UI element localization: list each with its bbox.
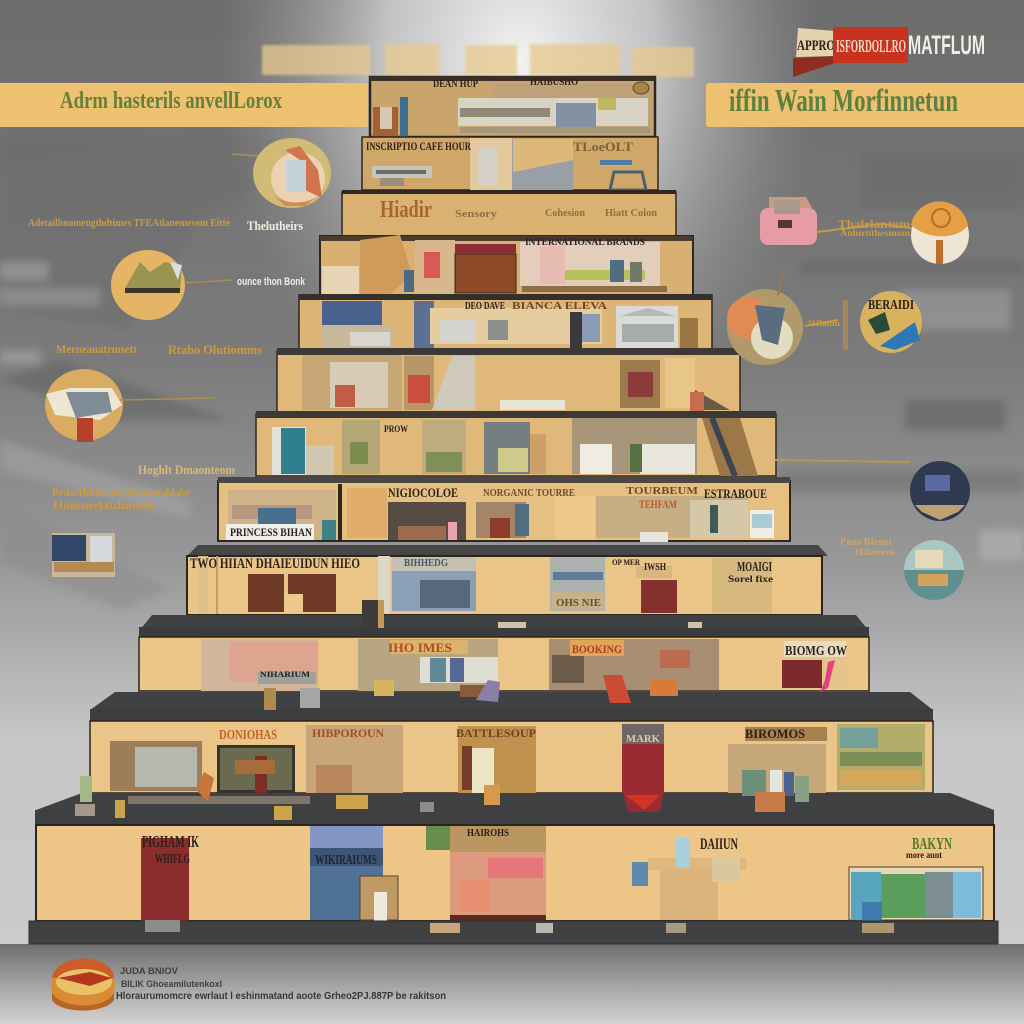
left banner [0, 83, 368, 127]
tier 5: DEO DAVE [465, 301, 505, 312]
furniture on roof terraces [75, 600, 809, 820]
tier 8: PRINCESS BIHAN [230, 525, 312, 539]
icon: blue shoe circle: BERAIDI [868, 298, 914, 313]
logo tag: APPRO [797, 38, 835, 54]
tier 9: IWSH [644, 561, 666, 573]
icon: pink bag [760, 197, 912, 245]
tier 8: NIGIOCOLOE [388, 485, 458, 500]
tier 12: BAKYN [912, 834, 952, 853]
right labels: Poas Blenst [840, 536, 892, 548]
tier 12: WHIFLG [155, 852, 190, 867]
tier 3: Sensory [455, 209, 497, 220]
tier 12: WIKIRAIUMS [315, 853, 377, 868]
tier 12: more aunt [906, 850, 942, 860]
tier 9 [187, 545, 828, 615]
icon: navy circle [775, 460, 970, 521]
left labels: Hoiosnelatdmosbl [53, 498, 156, 512]
left labels: Thelutheirs [247, 218, 303, 233]
tier 8: TOURBEUM [626, 485, 699, 497]
icon: portrait circle [232, 138, 331, 208]
icon: shoe circle [111, 250, 232, 320]
left labels: Hoghlt Dmaonteom [138, 462, 235, 477]
tier 4 [320, 235, 693, 295]
tier 11: BATTLESOUP [456, 726, 536, 740]
tier 12: PIGHAM IK [142, 832, 199, 851]
tier 3: Hiatt Colon [605, 207, 657, 219]
ghost header blocks [262, 44, 694, 77]
tier 11: MARK [626, 733, 660, 745]
tier 1 [370, 76, 655, 137]
left banner: Adrm hasterils anvellLorox [60, 88, 282, 114]
tier 9: MOAIGI [737, 560, 772, 575]
tier 8 [218, 477, 790, 542]
tier 11: HIBPOROUN [312, 726, 384, 740]
tier 9: OP MER [612, 558, 640, 567]
icon: orange swirl [911, 201, 969, 264]
footer text: BILIK Ghoeamilutenkoxl [121, 979, 222, 989]
icon: blue shoe circle [843, 291, 922, 353]
left labels: ounce thon Bonk [237, 276, 306, 288]
left labels [28, 217, 306, 512]
tier 9: OHS NIE [556, 598, 601, 609]
tier 5 [299, 294, 712, 352]
tier 10 [139, 615, 869, 692]
icon: fabric panel [52, 533, 115, 577]
footer text: Hloraurumomcre ewrlaut l eshinmatand aoote Grheo2PJ.887P be rakitson [116, 991, 446, 1002]
tier 12 [35, 793, 994, 924]
tier 2: TLoeOLT [573, 139, 633, 154]
tier 2 [362, 137, 658, 190]
footer text: JUDA BNIOV [120, 966, 178, 976]
tier 9: TWO HIIAN DHAIEUIDUN HIEO [190, 556, 360, 572]
tier 1: DEAN HUP [433, 79, 478, 90]
left labels: Rtabo Olutiomms [168, 342, 262, 357]
tier 12: HAIROHS [467, 827, 509, 839]
tier 12: DAIIUN [700, 836, 738, 853]
logo tag: ISFORDOLLRO [836, 36, 906, 56]
right labels: Hilanrm [855, 547, 896, 557]
right labels: IHlaum [808, 319, 840, 328]
logo tag [793, 27, 985, 77]
right labels: Anlurnthesmom [840, 228, 911, 238]
left labels: Adetailhnomengthdtimes TFEAtlanemesom Eitte [28, 217, 230, 229]
tier 7 [256, 411, 776, 476]
tier 8: TEHFAM [639, 497, 677, 511]
icon: teal circle [904, 540, 964, 600]
left labels: Brdaerldtiurmnsthemtmuldabe [52, 485, 191, 499]
tier 10: IHO IMES [388, 640, 452, 655]
tier 3: Cohesion [545, 208, 585, 219]
tier 3: Hiadir [380, 197, 432, 223]
tier 9: Sorel fixe [728, 574, 773, 584]
tier 11: DONIOHAS [219, 728, 277, 743]
tier 8: NORGANIC TOURRE [483, 487, 575, 499]
tier 11 [90, 692, 933, 796]
base slab [29, 920, 998, 944]
tier 11: BIROMOS [745, 726, 805, 741]
icon: burger badge [51, 958, 115, 1010]
tier 6 [277, 348, 740, 412]
tier 10: NIHARIUM [260, 670, 311, 679]
tier 9: BIHHEDG [404, 558, 448, 569]
icon: box circle [45, 369, 215, 442]
tier 10: BIOMG OW [785, 644, 847, 659]
tier 1: HAIBUSHO [530, 77, 578, 87]
right labels: Thalrlantum [838, 217, 910, 231]
tier 7: PROW [384, 424, 408, 434]
tier 2: INSCRIPTIO CAFE HOUR [366, 139, 471, 153]
tier 4: INTERNATIONAL BRANDS [525, 237, 645, 247]
tier 3 [342, 190, 676, 236]
tier 8: ESTRABOUE [704, 486, 767, 501]
left labels: Merneauatrmsett [56, 342, 137, 356]
icon: peach bag circle [727, 270, 838, 365]
tier 10: BOOKING [572, 642, 622, 656]
tier 5: BIANCA ELEVA [512, 300, 607, 312]
right labels [808, 217, 911, 557]
footer text [116, 966, 446, 1002]
